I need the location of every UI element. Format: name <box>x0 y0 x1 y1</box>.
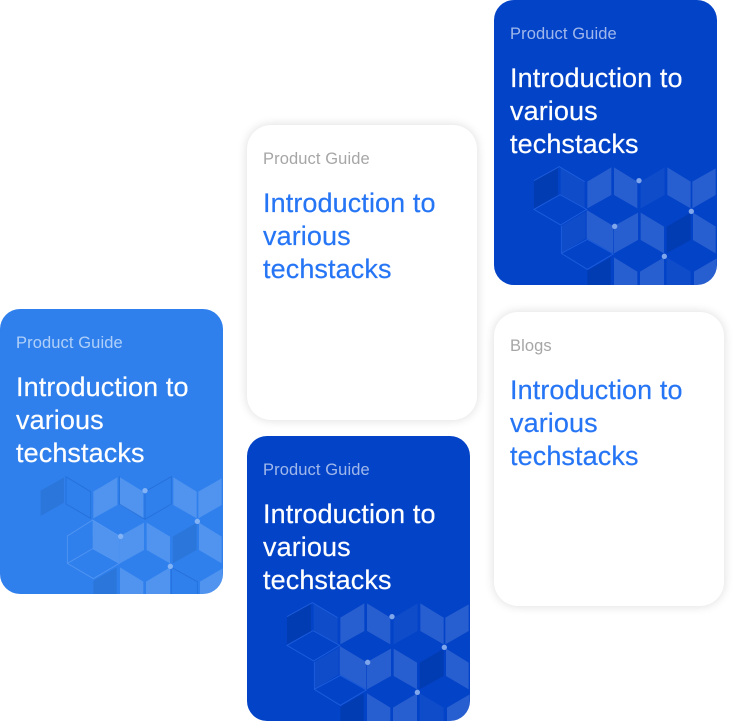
heading <box>510 63 683 159</box>
label: category: Product Guide <box>263 150 370 168</box>
panel: white card, blogs <box>494 312 724 606</box>
heading: various <box>263 221 351 251</box>
heading: various <box>510 408 598 438</box>
hexagon cube pattern <box>286 602 470 721</box>
hexagon cube pattern <box>534 166 717 285</box>
heading: Introduction to <box>510 375 683 405</box>
panel: navy card, top <box>494 0 717 285</box>
heading: various <box>16 405 104 435</box>
heading: techstacks <box>263 254 392 284</box>
panel: navy card, bottom <box>247 436 470 721</box>
heading: various <box>510 96 598 126</box>
heading <box>263 499 436 595</box>
label: category: Product Guide <box>16 334 123 352</box>
label: category: Product Guide <box>510 25 617 43</box>
heading: Introduction to <box>510 63 683 93</box>
heading: Introduction to <box>263 188 436 218</box>
panel: white card, product guide <box>247 125 477 420</box>
panel: light blue card <box>0 309 223 594</box>
label: category: Product Guide <box>263 461 370 479</box>
heading: techstacks <box>510 441 639 471</box>
heading: Introduction to <box>263 499 436 529</box>
heading <box>510 375 683 471</box>
heading: techstacks <box>510 129 639 159</box>
heading: Introduction to <box>16 372 189 402</box>
heading: techstacks <box>16 438 145 468</box>
hexagon cube pattern <box>40 476 223 594</box>
label: category: Blogs <box>510 337 552 355</box>
heading <box>263 188 436 284</box>
heading: various <box>263 532 351 562</box>
heading: techstacks <box>263 565 392 595</box>
heading <box>16 372 189 468</box>
